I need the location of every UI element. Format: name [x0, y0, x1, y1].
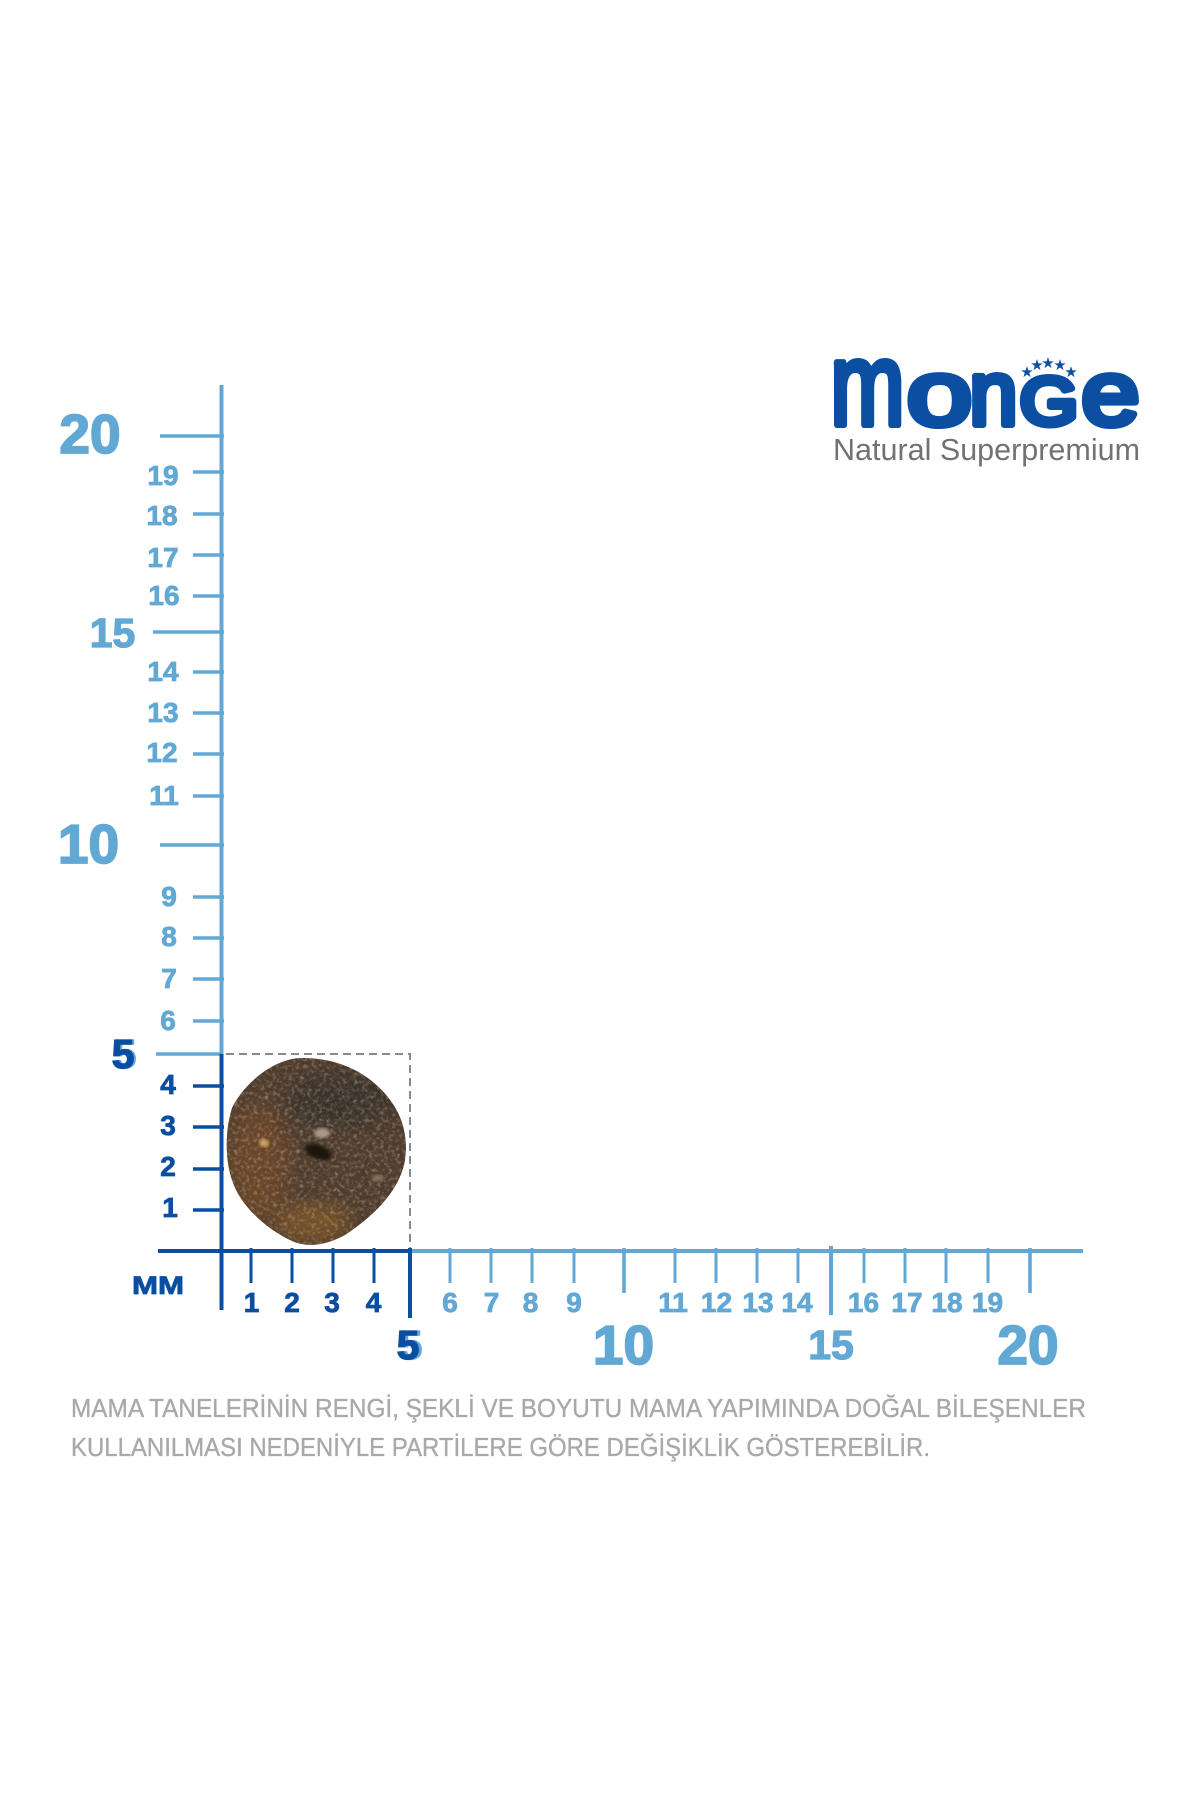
vertical axis labels: 15 [90, 610, 135, 656]
vertical axis labels [58, 403, 180, 1223]
vertical axis labels: 18 [146, 500, 178, 531]
vertical axis labels: 13 [147, 697, 179, 728]
logo wordmark: m [830, 318, 904, 450]
disclaimer text [71, 1393, 1086, 1462]
logo wordmark: o [907, 344, 972, 444]
horizontal axis labels: 7 [484, 1287, 499, 1318]
vertical axis labels: 19 [147, 460, 179, 491]
vertical axis labels: 3 [160, 1110, 176, 1141]
logo: Monge Natural Superpremium [830, 318, 1140, 467]
horizontal axis labels: 3 [324, 1287, 340, 1318]
logo wordmark: e [1082, 344, 1140, 444]
vertical axis labels: 8 [161, 921, 177, 952]
vertical axis labels: 6 [160, 1005, 176, 1036]
horizontal axis labels: 16 [848, 1287, 879, 1318]
horizontal axis labels: 2 [284, 1287, 300, 1318]
vertical axis labels: 9 [161, 881, 177, 912]
vertical axis labels: 5 [112, 1031, 134, 1077]
horizontal axis lines and ticks [158, 1246, 1083, 1318]
horizontal axis labels: 12 [701, 1287, 732, 1318]
disclaimer text: MAMA TANELERİNİN RENGİ, ŞEKLİ VE BOYUTU MAMA YAPIMINDA DOĞAL BİLEŞENLER [71, 1393, 1086, 1423]
vertical axis labels: 5 [114, 1031, 136, 1077]
logo wordmark: n [970, 344, 1018, 444]
vertical axis labels: 14 [147, 656, 179, 687]
logo stars: ★ [1053, 357, 1067, 374]
horizontal axis labels: 20 [997, 1314, 1059, 1376]
vertical axis labels: 12 [146, 737, 178, 768]
horizontal axis labels: 9 [566, 1287, 582, 1318]
vertical axis labels: 2 [160, 1151, 176, 1182]
horizontal axis labels: 10 [593, 1314, 654, 1376]
vertical axis labels: 11 [149, 780, 179, 811]
dashed 5 mm guide [226, 1054, 410, 1250]
horizontal axis labels: 17 [891, 1287, 923, 1318]
unit label MM: MM [132, 1272, 184, 1300]
horizontal axis labels: 4 [366, 1287, 382, 1318]
horizontal axis labels: 5 [400, 1322, 422, 1368]
photo: kibble [226, 1058, 406, 1245]
vertical axis labels: 10 [58, 813, 119, 875]
logo tagline: Natural Superpremium [833, 432, 1140, 467]
logo wordmark [830, 318, 1140, 450]
horizontal axis labels: 11 [658, 1287, 688, 1318]
logo wordmark: G [1020, 364, 1078, 440]
horizontal axis labels: 8 [523, 1287, 538, 1318]
horizontal axis labels: 13 [742, 1287, 774, 1318]
horizontal axis labels: 19 [972, 1287, 1003, 1318]
logo stars: ★ [1064, 364, 1078, 381]
horizontal axis labels: 5 [397, 1322, 419, 1368]
vertical axis labels: 4 [160, 1069, 176, 1100]
vertical axis lines and ticks [153, 385, 224, 1310]
disclaimer text: KULLANILMASI NEDENİYLE PARTİLERE GÖRE DEĞİŞİKLİK GÖSTEREBİLİR. [71, 1432, 930, 1462]
vertical axis labels: 1 [162, 1192, 178, 1223]
horizontal axis labels: 18 [931, 1287, 963, 1318]
vertical axis labels: 16 [148, 580, 180, 611]
logo stars: ★ [1020, 364, 1034, 381]
vertical axis labels: 17 [147, 542, 179, 573]
horizontal axis labels: 1 [244, 1287, 259, 1318]
vertical axis labels: 7 [161, 963, 177, 994]
logo stars: ★ [1030, 357, 1044, 374]
logo stars: ★ [1041, 355, 1055, 372]
horizontal axis labels: 15 [808, 1322, 854, 1368]
vertical axis labels: 20 [59, 403, 121, 465]
horizontal axis labels: 6 [442, 1287, 458, 1318]
horizontal axis labels: 14 [781, 1287, 813, 1318]
horizontal axis labels [244, 1287, 1059, 1376]
infographic canvas [60, 357, 1139, 1462]
logo stars [1020, 355, 1078, 381]
